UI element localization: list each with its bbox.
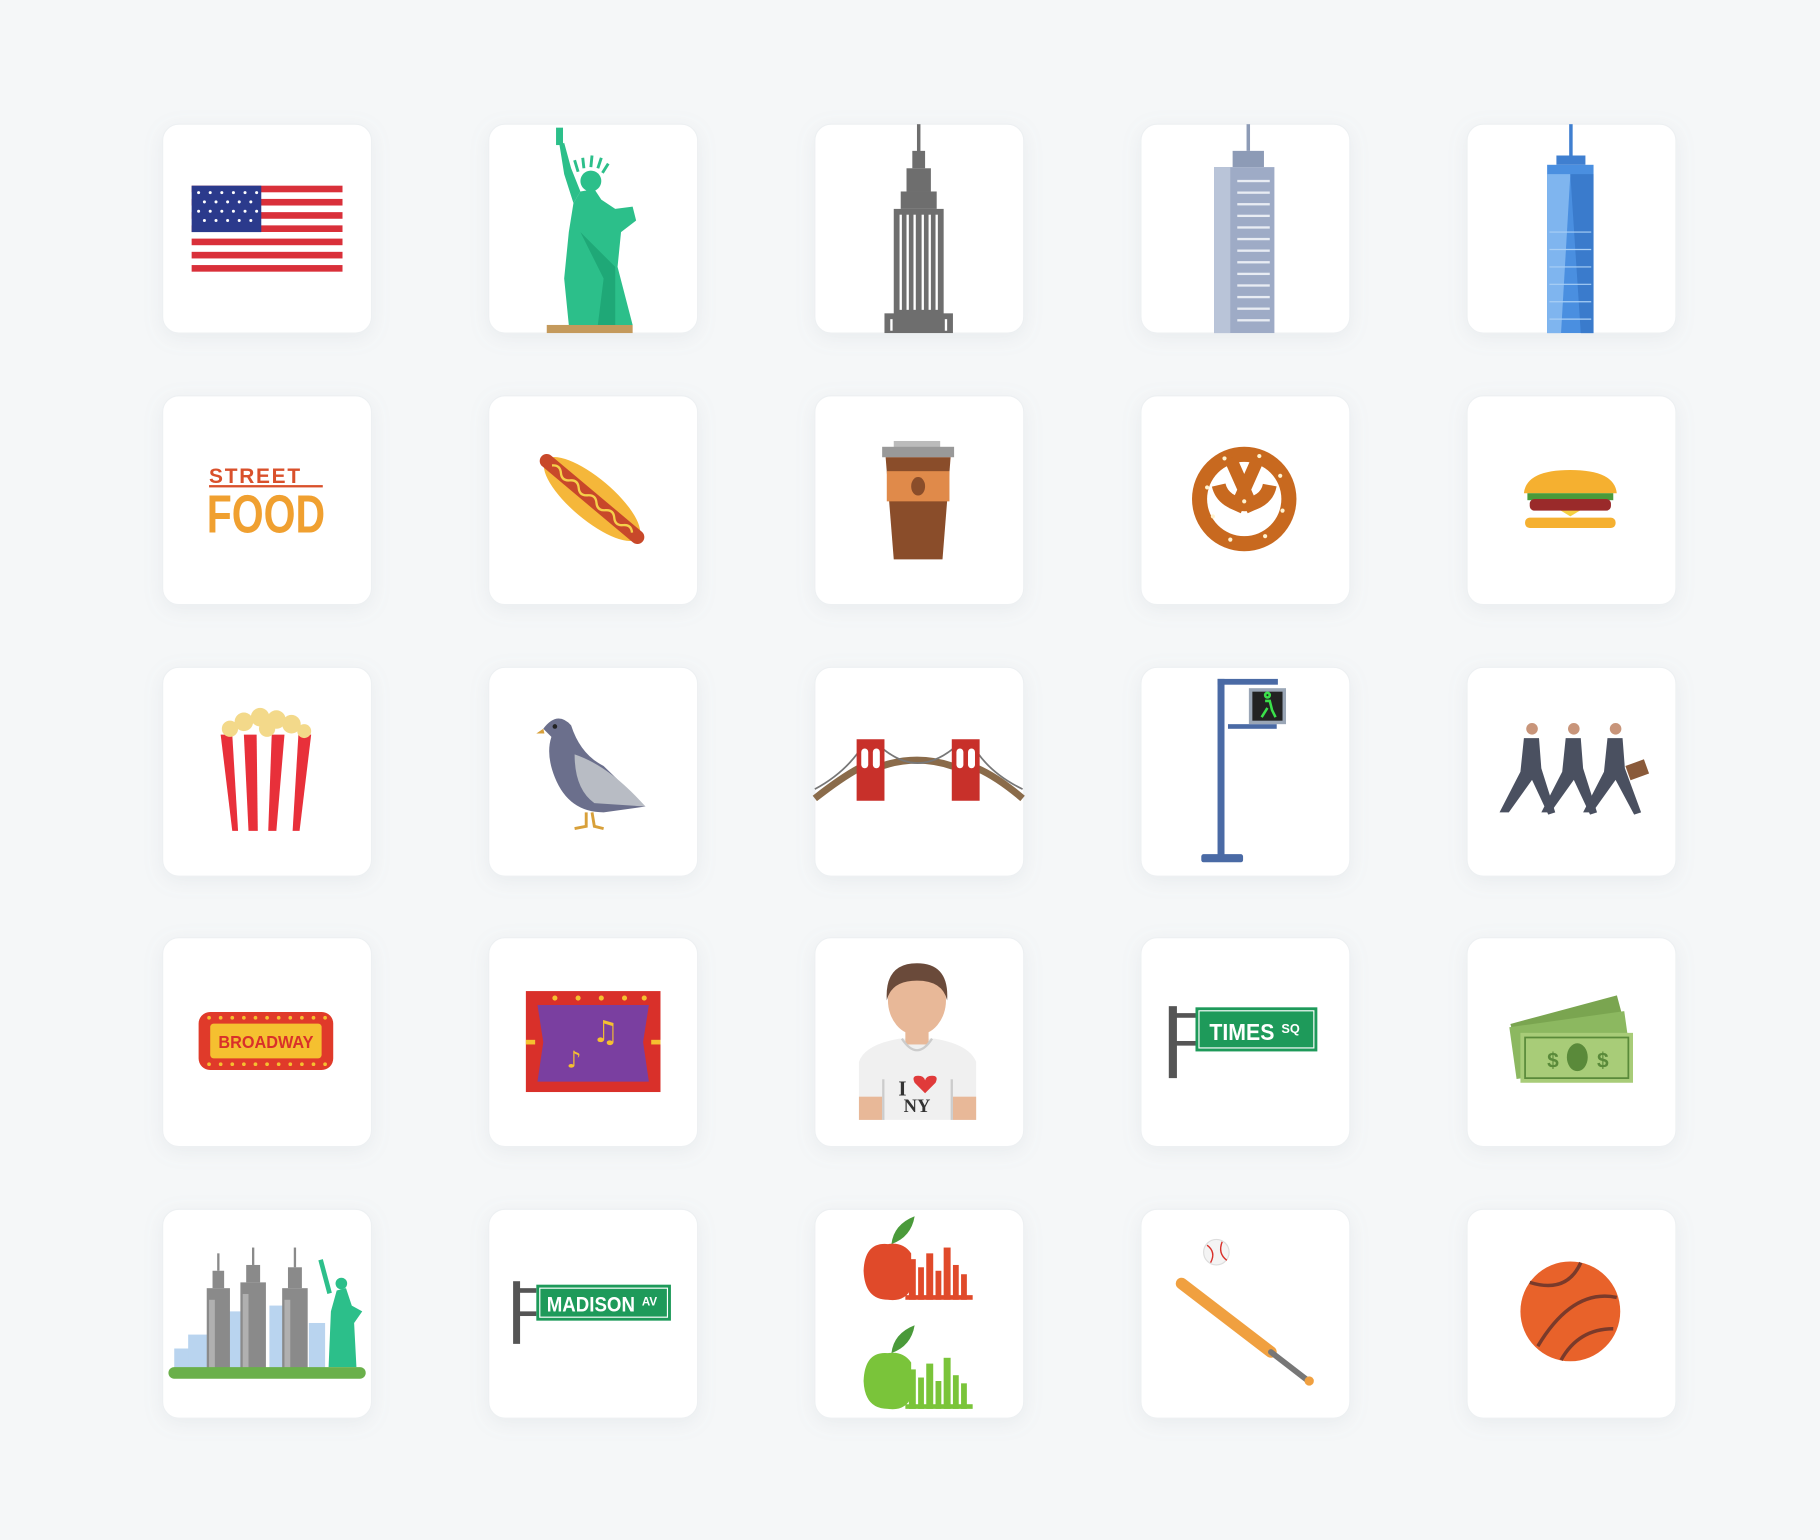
icon: theater stage: ♪ bbox=[566, 1047, 581, 1074]
icon: I love NY person bbox=[859, 963, 976, 1120]
icon: theater stage: ♫ bbox=[592, 1015, 619, 1050]
icon: money bbox=[1509, 995, 1633, 1083]
icon: big apple red and green bbox=[864, 1216, 973, 1409]
icon: madison avenue sign bbox=[513, 1281, 671, 1344]
icon: broadway sign bbox=[199, 1012, 333, 1070]
icon: burger bbox=[1524, 470, 1617, 528]
icon: madison avenue sign: AV bbox=[642, 1296, 657, 1309]
icon: statue of liberty bbox=[547, 128, 636, 333]
icon: times square sign bbox=[1169, 1006, 1317, 1078]
icon: money: $ bbox=[1547, 1050, 1559, 1073]
icon: times square sign: SQ bbox=[1281, 1021, 1300, 1036]
icon: hot dog bbox=[528, 440, 656, 558]
icon: empire state building bbox=[884, 124, 953, 333]
cards grid bbox=[163, 124, 1676, 1418]
icon: broadway sign: BROADWAY bbox=[218, 1032, 314, 1052]
icon: basketball bbox=[1520, 1261, 1620, 1361]
icon: street food text: STREET bbox=[209, 465, 302, 488]
icon: I love NY person: NY bbox=[904, 1096, 931, 1117]
icon: theater stage bbox=[526, 991, 660, 1092]
icon: coffee cup bbox=[882, 441, 954, 559]
icon: street food text: FOOD bbox=[207, 486, 325, 545]
icon: times square sign: TIMES bbox=[1209, 1019, 1274, 1045]
icon: walking businessmen bbox=[1500, 723, 1649, 815]
icon: brooklyn bridge bbox=[815, 739, 1023, 801]
icon: popcorn bbox=[221, 708, 311, 831]
icon: pedestrian signal bbox=[1201, 679, 1286, 862]
icon: NYC skyline bbox=[168, 1248, 366, 1379]
icon: pigeon bbox=[536, 719, 645, 829]
icon: baseball bat and ball bbox=[1182, 1239, 1314, 1386]
icon: I love NY person: I bbox=[898, 1077, 907, 1101]
icon: street food text bbox=[207, 465, 325, 545]
icon: money: $ bbox=[1597, 1050, 1609, 1073]
icon: one world trade center bbox=[1547, 124, 1594, 333]
icon: madison avenue sign: MADISON bbox=[547, 1293, 635, 1316]
icon: US flag bbox=[192, 186, 343, 272]
icon: pretzel bbox=[1192, 447, 1296, 551]
icon: skyscraper tower bbox=[1214, 124, 1274, 333]
